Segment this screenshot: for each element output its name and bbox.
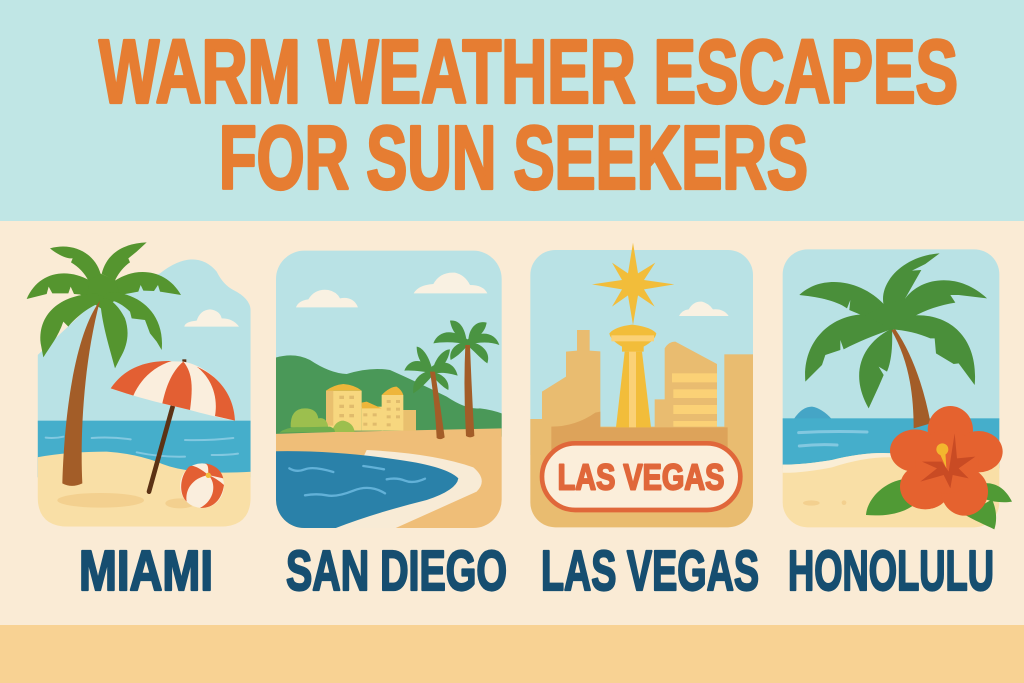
sky	[33, 257, 253, 423]
bay water	[273, 451, 458, 528]
surf line	[330, 450, 482, 528]
star	[592, 243, 674, 325]
island	[794, 407, 832, 419]
water ripples	[289, 466, 425, 496]
sand shadows	[57, 493, 144, 508]
panel: Honolulu	[780, 247, 1012, 530]
hibiscus leaves	[866, 479, 1012, 529]
label: Miami: MIAMI	[79, 539, 213, 603]
hotel stripes	[672, 373, 717, 428]
stamen	[940, 452, 946, 468]
sandy shore	[273, 428, 503, 530]
panel: Las Vegas	[529, 243, 755, 530]
palm trees	[404, 321, 499, 439]
shrubs	[279, 408, 355, 433]
city labels	[79, 539, 994, 603]
panel: Miami	[27, 242, 253, 530]
sky	[273, 248, 507, 435]
sand	[33, 452, 253, 530]
ground	[529, 419, 755, 530]
plaza	[551, 412, 728, 450]
cloud	[296, 290, 358, 307]
sky	[529, 248, 755, 455]
sand footer band	[0, 625, 1024, 683]
stratosphere tower	[609, 325, 656, 427]
sky	[780, 247, 1004, 420]
waves	[799, 431, 867, 446]
hotel buildings	[326, 384, 416, 431]
title	[99, 22, 958, 208]
cloud	[414, 273, 487, 293]
skyline	[542, 330, 600, 430]
header band	[0, 0, 1024, 221]
welcome sign: LAS VEGAS	[558, 456, 724, 497]
panel: San Diego	[273, 248, 507, 530]
cloud	[184, 309, 239, 327]
flower veins	[920, 433, 975, 488]
sea	[780, 418, 1004, 468]
label: Las Vegas: LAS VEGAS	[541, 539, 759, 603]
waves	[46, 437, 238, 457]
welcome sign	[542, 443, 740, 510]
cream middle band	[0, 221, 1024, 625]
beach ball	[180, 463, 224, 508]
sand specks	[803, 500, 820, 506]
cloud	[679, 302, 729, 316]
label: San Diego: SAN DIEGO	[286, 539, 507, 603]
palm tree	[799, 253, 987, 428]
beach umbrella	[111, 359, 235, 492]
sand	[780, 453, 1004, 530]
hibiscus flower	[890, 406, 1003, 516]
palm tree	[27, 242, 181, 486]
green hills	[273, 355, 503, 437]
sea	[33, 421, 253, 477]
